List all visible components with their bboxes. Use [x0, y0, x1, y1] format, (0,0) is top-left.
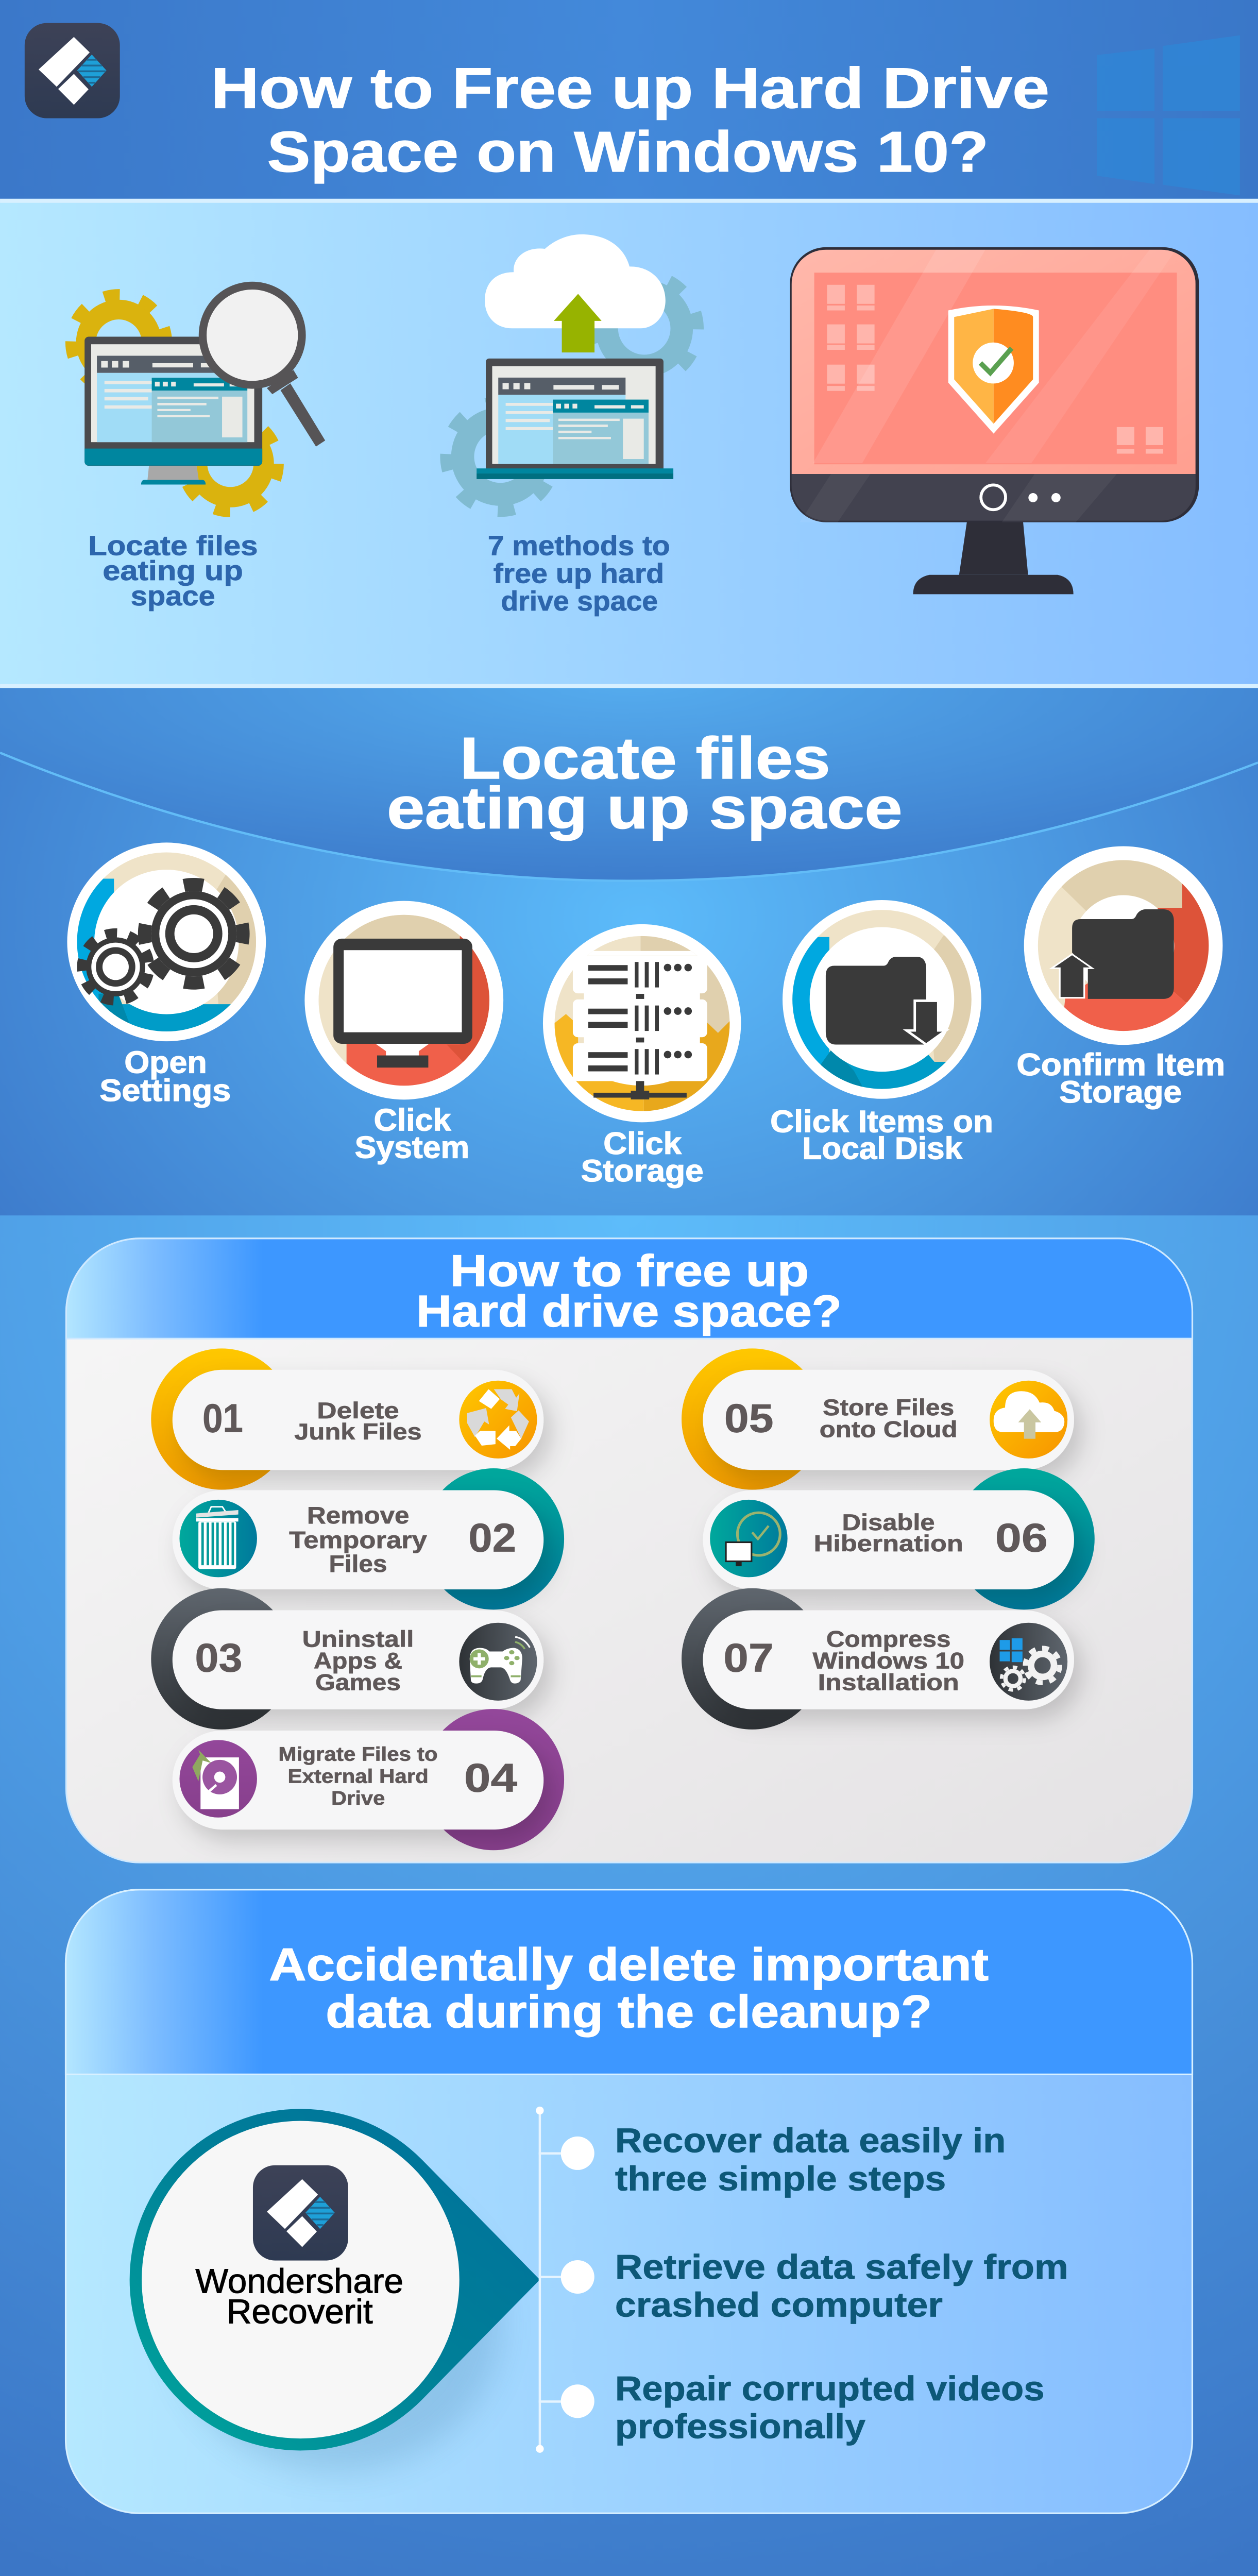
icon: desktop squares: [827, 285, 1163, 454]
step 4: click items on local disk: [772, 895, 985, 1117]
item 03 uninstall apps and games: Games: [315, 1670, 401, 1695]
timeline: [536, 2107, 594, 2453]
icon: shield: [948, 306, 1039, 434]
icon: gamepad: [459, 1623, 537, 1701]
label: confirm item storage: Storage: [1059, 1074, 1182, 1109]
heading: [387, 725, 903, 841]
icon: server stack: [573, 956, 707, 1099]
title: [211, 56, 1049, 184]
icon: power button and dots: [981, 485, 1061, 510]
label: click items on local disk: [770, 1104, 993, 1166]
benefit 1: [615, 2122, 1006, 2198]
benefit 3: [615, 2369, 1045, 2446]
text: 7 methods label: [488, 531, 670, 617]
item 07 compress windows 10 installation: Installation: [818, 1670, 959, 1695]
panel: recoverit: [66, 1890, 1192, 2513]
item 03 uninstall apps and games: [151, 1588, 543, 1730]
item 04 migrate files to external hard drive: External Hard: [288, 1766, 429, 1788]
title: How to Free up Hard Drive: [211, 56, 1049, 120]
brand name: Wondershare: [195, 2262, 403, 2300]
benefit 1: Recover data easily in: [615, 2122, 1006, 2160]
icon: windows and gears: [990, 1623, 1067, 1701]
item 04 migrate files to external hard drive: [173, 1709, 564, 1850]
icon: desktop monitor with shield: [790, 247, 1199, 594]
label: open settings: Open: [124, 1045, 207, 1080]
item 03 uninstall apps and games: 03: [195, 1635, 243, 1681]
item 02 remove temporary files: [173, 1468, 564, 1609]
benefit 2: Retrieve data safely from: [615, 2248, 1068, 2286]
icon: recycle: [459, 1381, 537, 1459]
heading: Accidentally delete important: [269, 1939, 989, 1990]
label: click system: Click: [374, 1102, 451, 1137]
item 04 migrate files to external hard drive: Migrate Files to: [278, 1743, 438, 1765]
benefit 2: [615, 2248, 1068, 2325]
item 03 uninstall apps and games: Uninstall: [302, 1626, 414, 1652]
icon: wondershare logo: [25, 23, 120, 118]
item 02 remove temporary files: Remove: [307, 1502, 409, 1529]
brand name: Recoverit: [227, 2293, 373, 2331]
callout: wondershare recoverit pin: [130, 2109, 540, 2472]
label: click system: [355, 1102, 469, 1165]
heading: Hard drive space?: [416, 1286, 842, 1336]
icon: laptop with cloud upload: [441, 234, 705, 516]
label: open settings: Settings: [99, 1073, 231, 1108]
item 01 delete junk files: Junk Files: [294, 1419, 422, 1445]
item 04 migrate files to external hard drive: 04: [464, 1755, 518, 1801]
item 02 remove temporary files: Temporary: [289, 1527, 427, 1553]
item 02 remove temporary files: Files: [329, 1550, 387, 1577]
icon: gears: [75, 885, 243, 1008]
text: 7 methods label: 7 methods to: [488, 531, 670, 562]
panel: overview: [0, 199, 1258, 688]
item 07 compress windows 10 installation: 07: [723, 1635, 774, 1681]
benefit 3: Repair corrupted videos: [615, 2369, 1045, 2408]
label: click items on local disk: Click Items on: [770, 1104, 993, 1139]
heading: eating up space: [387, 775, 903, 841]
text: 7 methods label: drive space: [501, 586, 658, 617]
text: locate files label: eating up: [103, 555, 243, 586]
icon: folder with up arrow: [1052, 909, 1174, 999]
step 2: click system: [304, 901, 503, 1100]
icon: trash can: [179, 1500, 257, 1577]
item 06 disable hibernation: 06: [995, 1515, 1048, 1561]
heading: data during the cleanup?: [326, 1986, 932, 2037]
text: locate files label: [88, 531, 258, 612]
header band: [0, 0, 1258, 200]
item 05 store files onto cloud: Store Files: [823, 1395, 954, 1420]
item 03 uninstall apps and games: Apps &: [314, 1648, 402, 1673]
heading: [269, 1939, 989, 2037]
text: locate files label: Locate files: [88, 531, 258, 562]
item 04 migrate files to external hard drive: Drive: [331, 1787, 385, 1809]
title: Space on Windows 10?: [267, 120, 989, 184]
brand name: [195, 2262, 403, 2331]
icon: recoverit logo: [253, 2165, 348, 2261]
label: click items on local disk: Local Disk: [802, 1131, 962, 1166]
text: 7 methods label: free up hard: [494, 558, 664, 589]
heading: Locate files: [460, 725, 830, 791]
icon: monitor: [333, 939, 472, 1067]
label: click storage: Storage: [581, 1153, 704, 1188]
benefit 1: three simple steps: [615, 2159, 946, 2198]
item 02 remove temporary files: 02: [468, 1515, 516, 1561]
item 05 store files onto cloud: 05: [724, 1395, 774, 1440]
label: open settings: [99, 1045, 231, 1108]
item 05 store files onto cloud: onto Cloud: [820, 1417, 958, 1442]
item 06 disable hibernation: [703, 1468, 1095, 1609]
label: confirm item storage: [1016, 1047, 1225, 1109]
icon: folder with down arrow: [826, 957, 946, 1045]
item 06 disable hibernation: Hibernation: [814, 1531, 963, 1556]
icon: hard disk: [179, 1740, 257, 1818]
label: click storage: [581, 1126, 704, 1188]
panel: how to free up hard drive space: [66, 1239, 1192, 1862]
item 01 delete junk files: Delete: [317, 1398, 399, 1423]
heading: [416, 1246, 842, 1336]
icon: cloud upload: [990, 1381, 1067, 1459]
label: click storage: Click: [603, 1126, 682, 1161]
panel: locate files section: [0, 688, 1258, 1215]
label: confirm item storage: Confirm Item: [1016, 1047, 1225, 1082]
benefit 2: crashed computer: [615, 2286, 943, 2325]
icon: clock and monitor: [710, 1500, 788, 1577]
icon: windows logo watermark: [1097, 36, 1240, 195]
step 3: click storage: [543, 924, 741, 1122]
item 01 delete junk files: 01: [202, 1395, 243, 1440]
item 07 compress windows 10 installation: [682, 1588, 1074, 1730]
text: locate files label: space: [131, 581, 215, 612]
step 1: open settings: [67, 842, 266, 1042]
background: lower sections: [0, 1215, 1258, 2576]
item 07 compress windows 10 installation: Windows 10: [812, 1648, 964, 1673]
item 07 compress windows 10 installation: Compress: [826, 1626, 951, 1652]
item 01 delete junk files: [151, 1348, 543, 1489]
step 5: confirm item storage: [1024, 846, 1248, 1051]
heading: How to free up: [450, 1246, 809, 1296]
label: click system: System: [355, 1130, 469, 1165]
item 05 store files onto cloud: [682, 1348, 1074, 1489]
icon: monitor with magnifier: [65, 285, 325, 519]
item 06 disable hibernation: Disable: [842, 1510, 935, 1535]
benefit 3: professionally: [615, 2408, 865, 2446]
